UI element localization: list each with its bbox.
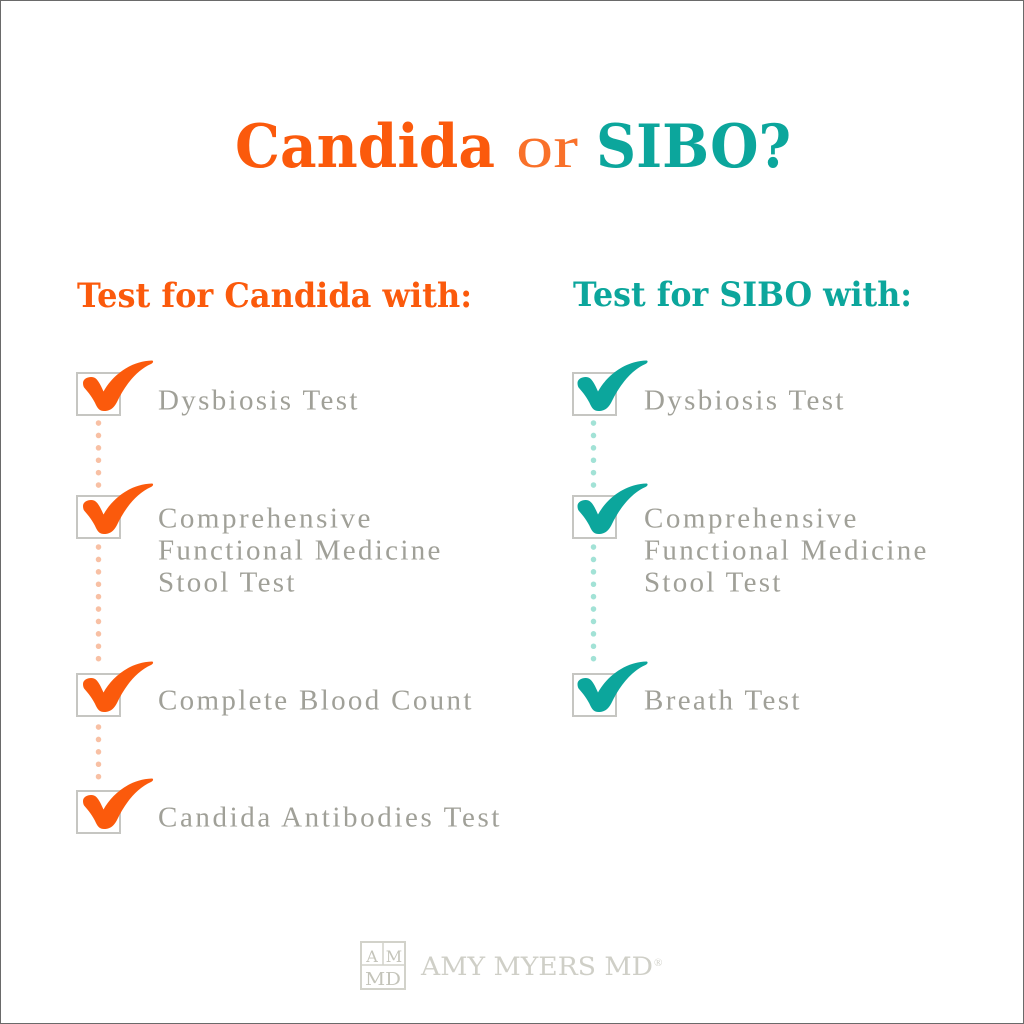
item: Comprehensive Functional Medicine Stool Test xyxy=(573,484,928,598)
logo mark: MD xyxy=(365,969,401,990)
item: Candida Antibodies Test xyxy=(77,778,501,834)
item: Comprehensive Functional Medicine Stool Test: Functional Medicine xyxy=(644,534,928,566)
logo: Amy Myers MD xyxy=(361,942,662,990)
item: Candida Antibodies Test: Candida Antibodies Test xyxy=(158,802,501,834)
wordmark: AMY MYERS MD xyxy=(420,952,653,981)
item: Comprehensive Functional Medicine Stool Test: Comprehensive xyxy=(158,502,372,534)
item: Dysbiosis Test: Dysbiosis Test xyxy=(158,384,359,416)
dotted connector line xyxy=(591,423,596,668)
logo mark: M xyxy=(386,947,402,966)
item: Comprehensive Functional Medicine Stool Test xyxy=(77,484,442,598)
heading: Test for SIBO: Test for SIBO with: xyxy=(573,275,912,315)
item: Comprehensive Functional Medicine Stool Test: Stool Test xyxy=(158,566,296,598)
item: Dysbiosis Test xyxy=(573,360,845,416)
item: Breath Test: Breath Test xyxy=(644,684,801,716)
panel: Candida tests xyxy=(77,276,501,834)
title: Candida xyxy=(235,112,495,182)
item: Breath Test xyxy=(573,662,801,716)
item: Dysbiosis Test xyxy=(77,360,359,416)
logo mark: A xyxy=(365,947,378,966)
item: Comprehensive Functional Medicine Stool Test: Stool Test xyxy=(644,566,782,598)
dotted connector line xyxy=(96,423,101,785)
item: Comprehensive Functional Medicine Stool Test: Functional Medicine xyxy=(158,534,442,566)
heading: Test for Candida: Test for Candida with: xyxy=(77,276,472,316)
title xyxy=(235,112,791,182)
logo mark xyxy=(361,942,405,990)
title: SIBO? xyxy=(596,112,791,182)
item: Dysbiosis Test: Dysbiosis Test xyxy=(644,384,845,416)
item: Complete Blood Count xyxy=(77,662,473,716)
title: or xyxy=(516,114,578,180)
registered mark: ® xyxy=(654,957,662,969)
panel: SIBO tests xyxy=(573,275,928,716)
item: Complete Blood Count: Complete Blood Count xyxy=(158,684,473,716)
item: Comprehensive Functional Medicine Stool Test: Comprehensive xyxy=(644,502,858,534)
